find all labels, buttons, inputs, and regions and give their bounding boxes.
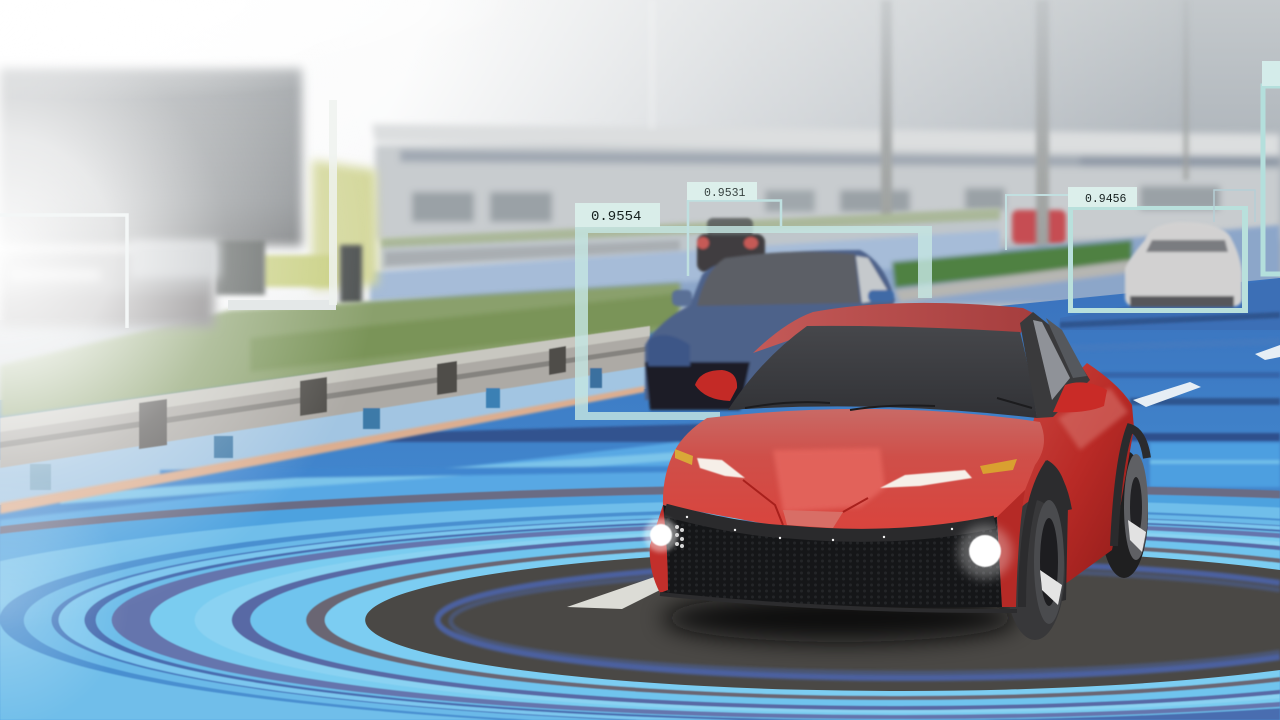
side pillar and windows bbox=[1020, 312, 1090, 418]
left headlight bbox=[675, 449, 745, 478]
far right road bbox=[1060, 278, 1280, 330]
red car bbox=[644, 303, 1148, 642]
background sky bbox=[0, 0, 1280, 320]
detection box on left foggy cars bbox=[0, 215, 127, 328]
detection box 0.9456 bbox=[1068, 187, 1248, 313]
hood crease lines bbox=[743, 480, 868, 525]
nose panel bbox=[783, 510, 843, 528]
small detection box far right bbox=[1214, 190, 1255, 222]
dark blue car behind bbox=[645, 250, 895, 410]
right mirror bbox=[1053, 382, 1107, 412]
front fender arch bbox=[1022, 466, 1068, 607]
left fog light bbox=[644, 518, 684, 552]
car shadow bbox=[662, 594, 1018, 642]
windshield bbox=[728, 326, 1037, 418]
wipers bbox=[745, 398, 1032, 410]
far road and verge bbox=[360, 208, 1280, 312]
road stripes bbox=[0, 312, 1280, 530]
bumper marker dots bbox=[686, 516, 953, 541]
main road surface bbox=[0, 278, 1280, 720]
guardrail bbox=[0, 326, 650, 490]
inner blue sensor ring bbox=[437, 562, 1280, 678]
left bumper side bbox=[650, 505, 668, 593]
white fog overlay on the left bbox=[0, 0, 560, 720]
bumper top band bbox=[665, 510, 995, 535]
detection box 0.9456: 0.9456 bbox=[1085, 193, 1127, 206]
light poles bbox=[648, 0, 1189, 275]
detection box 0.9554: 0.9554 bbox=[591, 209, 641, 225]
car body side bbox=[1005, 363, 1134, 610]
rear wheel bbox=[1100, 450, 1148, 578]
front wheel bbox=[1005, 500, 1065, 640]
right headlight bbox=[880, 459, 1017, 488]
hood and front fenders bbox=[663, 409, 1044, 530]
front wheel arch fill bbox=[1020, 460, 1068, 610]
roadside grass bbox=[0, 283, 680, 418]
lower lip bbox=[660, 594, 1017, 611]
rear wheel arch bbox=[1114, 428, 1147, 546]
black bumper grille bbox=[660, 505, 1002, 607]
detection box 0.9554 bbox=[575, 203, 932, 420]
white car bbox=[1125, 222, 1242, 307]
orange lane line bbox=[0, 386, 645, 514]
pale road strip behind guardrail bbox=[0, 345, 650, 505]
dark asphalt disk under the car bbox=[365, 549, 1280, 691]
distant dark car bbox=[697, 218, 765, 272]
detection box 0.9531: 0.9531 bbox=[704, 187, 746, 200]
distant red car bbox=[1012, 210, 1066, 244]
lane markings bbox=[567, 345, 1280, 609]
background building bbox=[372, 124, 1280, 240]
detection box 0.9531 bbox=[687, 182, 781, 276]
concentric sensor rings bbox=[0, 484, 1280, 720]
roof bbox=[753, 303, 1033, 353]
small detection box around red car bbox=[1006, 195, 1068, 250]
detection box at right edge bbox=[1262, 61, 1280, 274]
right fog light bbox=[958, 525, 1012, 579]
hood centre panel bbox=[773, 448, 885, 512]
right bumper side bbox=[997, 490, 1025, 607]
left mirror bbox=[695, 370, 737, 401]
detection box around truck bbox=[228, 100, 337, 310]
truck in the distance bbox=[0, 68, 378, 303]
foggy cars on the left bbox=[0, 240, 220, 328]
door highlight bbox=[1058, 388, 1128, 450]
